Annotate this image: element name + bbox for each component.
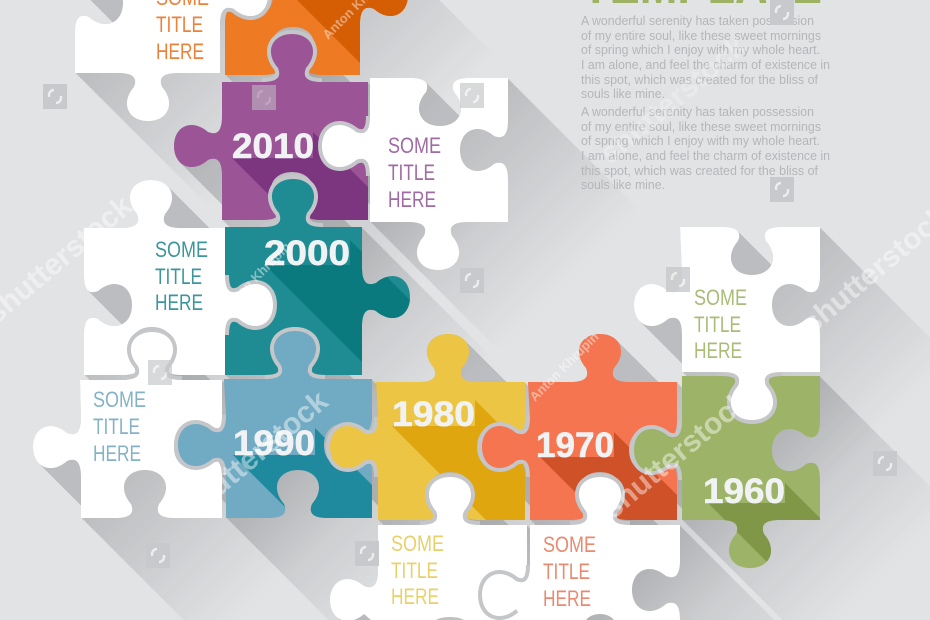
puzzle piece: white, purple title: SOME xyxy=(388,133,441,158)
body text: of my entire soul, like these sweet mornings xyxy=(581,120,821,134)
puzzle piece: white, coral title xyxy=(482,477,680,620)
puzzle piece: white, yellow title: SOME xyxy=(391,531,444,556)
puzzle piece: yellow 1980: 1980 xyxy=(392,395,475,434)
puzzle piece: white, teal title: TITLE xyxy=(155,264,202,289)
watermark text: Anton Khrupin xyxy=(219,239,293,314)
puzzle piece: white, coral title: TITLE xyxy=(543,559,590,584)
puzzle piece: white, yellow title: TITLE xyxy=(391,558,438,583)
puzzle piece: white, teal title: HERE xyxy=(155,290,203,315)
puzzle piece: white, green title: SOME xyxy=(694,285,747,310)
body text: this spot, which was created for the bliss of xyxy=(581,164,819,178)
puzzle piece: white, purple title: TITLE xyxy=(388,160,435,185)
puzzle piece: white, blue title: SOME xyxy=(93,387,146,412)
watermark text: shutterstock xyxy=(593,29,753,170)
puzzle piece: white, coral title: SOME xyxy=(543,532,596,557)
puzzle piece: yellow 1980 xyxy=(330,334,530,525)
body text xyxy=(581,14,830,192)
puzzle piece: coral 1970 xyxy=(482,334,682,525)
puzzle piece: purple 2010 xyxy=(174,34,373,225)
puzzle piece: white, teal title xyxy=(84,180,273,375)
watermark text: shutterstock xyxy=(596,384,756,525)
body text: of my entire soul, like these sweet mornings xyxy=(581,29,821,43)
puzzle piece: coral 1970: 1970 xyxy=(536,426,614,465)
puzzle piece: white, yellow title xyxy=(330,477,527,620)
puzzle piece: white, blue title: TITLE xyxy=(93,414,140,439)
body text: souls like mine. xyxy=(581,87,665,101)
puzzle piece: white, green title xyxy=(634,227,820,420)
body text: I am alone, and feel the charm of existence in xyxy=(581,58,830,72)
body text: of spring which I enjoy with my whole heart. xyxy=(581,43,820,57)
body text: souls like mine. xyxy=(581,178,665,192)
body text: I am alone, and feel the charm of existence in xyxy=(581,149,830,163)
puzzle piece: light blue 1990: 1990 xyxy=(233,424,315,463)
body text: A wonderful serenity has taken possession xyxy=(581,14,814,28)
puzzle piece: white, blue title xyxy=(33,332,222,518)
puzzle piece: white, purple title xyxy=(322,78,508,270)
puzzle piece: white, purple title: HERE xyxy=(388,187,436,212)
puzzle piece: teal 2000 xyxy=(225,179,420,380)
body text: this spot, which was created for the bliss of xyxy=(581,73,819,87)
puzzle piece: purple 2010: 2010 xyxy=(232,127,314,166)
puzzle piece: green 1960 xyxy=(633,376,820,568)
puzzle piece: white, orange title xyxy=(75,0,268,121)
watermark text: shutterstock xyxy=(175,384,335,525)
puzzle piece: light blue 1990 xyxy=(178,331,380,525)
body text: A wonderful serenity has taken possession xyxy=(581,105,814,119)
puzzle piece: white, orange title: HERE xyxy=(156,39,204,64)
puzzle piece: green 1960: 1960 xyxy=(703,472,785,511)
body text: of spring which I enjoy with my whole heart. xyxy=(581,134,820,148)
puzzle piece: orange xyxy=(225,0,420,75)
puzzle piece: white, green title: TITLE xyxy=(694,312,741,337)
watermark text: Anton Khrupin xyxy=(527,329,601,404)
puzzle piece: white, blue title: HERE xyxy=(93,441,141,466)
puzzle piece: teal 2000: 2000 xyxy=(264,234,350,273)
puzzle piece: white, orange title: TITLE xyxy=(156,12,203,37)
puzzle piece: white, yellow title: HERE xyxy=(391,584,439,609)
puzzle piece: white, teal title: SOME xyxy=(155,237,208,262)
puzzle piece: white, green title: HERE xyxy=(694,338,742,363)
puzzle piece: white, coral title: HERE xyxy=(543,586,591,611)
